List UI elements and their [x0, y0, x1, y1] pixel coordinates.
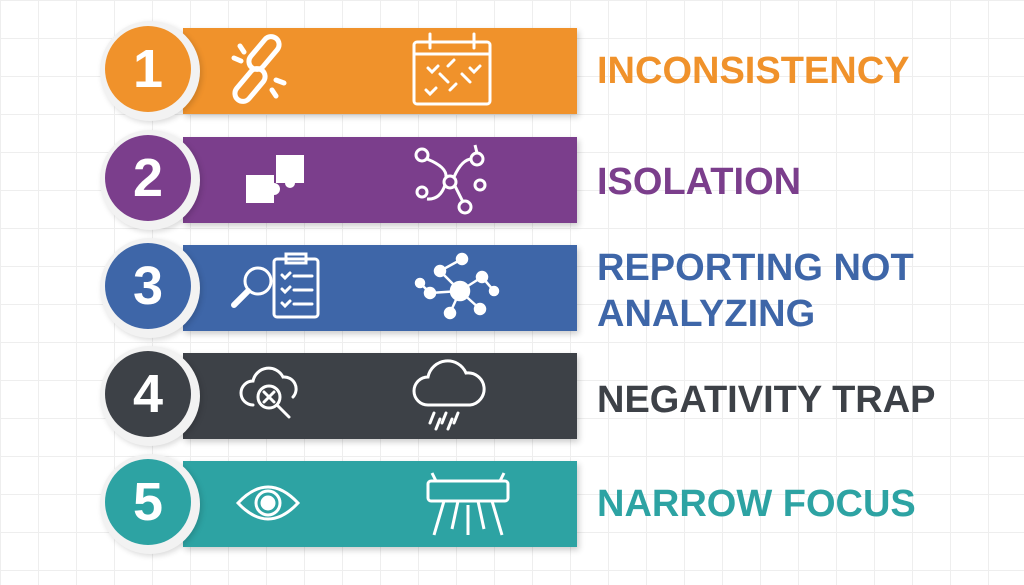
circle 1 — [100, 21, 200, 121]
icon: broken chain — [232, 34, 286, 104]
label 2: ISOLATION — [597, 161, 801, 203]
label 4: NEGATIVITY TRAP — [597, 379, 936, 421]
label 3 — [597, 247, 914, 335]
row 4 — [100, 346, 936, 450]
circle 2 — [100, 130, 200, 230]
icon: storm cloud — [412, 359, 486, 430]
label 5: NARROW FOCUS — [597, 483, 916, 525]
icon: network — [414, 144, 486, 214]
row 2 — [100, 130, 801, 234]
bar 3 — [183, 245, 577, 331]
label 3: ANALYZING — [597, 293, 815, 335]
circle 4: 4 — [133, 364, 163, 424]
icon: molecule network — [414, 252, 500, 320]
circle 3 — [100, 238, 200, 338]
icon: puzzle — [246, 155, 304, 203]
label 1: INCONSISTENCY — [597, 50, 909, 92]
bar 2 — [183, 137, 577, 223]
bar 4 — [183, 353, 577, 439]
circle 3: 3 — [133, 256, 163, 316]
icon: calendar — [412, 32, 492, 106]
circle 1: 1 — [133, 39, 163, 99]
bar 5 — [183, 461, 577, 547]
row 5 — [100, 454, 916, 558]
circle 5 — [100, 454, 200, 554]
circle 2: 2 — [133, 148, 163, 208]
icon: blinders — [426, 472, 510, 536]
bar 1 — [183, 28, 577, 114]
icon: cloud search — [240, 366, 298, 419]
row 3 — [100, 238, 914, 342]
label 3: REPORTING NOT — [597, 247, 914, 289]
icon: eye — [236, 486, 300, 520]
circle 5: 5 — [133, 472, 163, 532]
icon: magnifier clipboard — [231, 252, 320, 318]
circle 4 — [100, 346, 200, 446]
row 1 — [100, 21, 909, 125]
